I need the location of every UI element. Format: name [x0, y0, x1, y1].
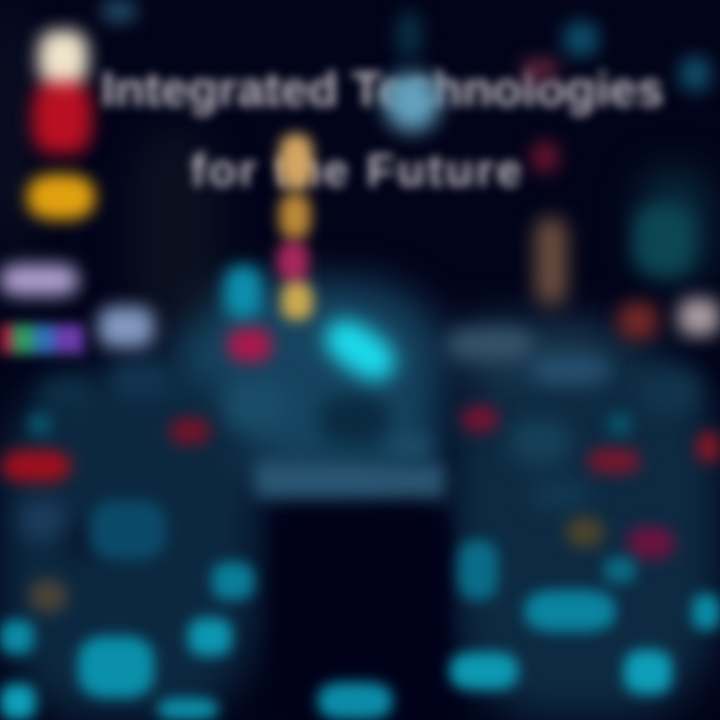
icon: yellow badge — [27, 174, 95, 220]
title: Integrated Technologies — [101, 63, 664, 117]
panel: base bar above screen — [255, 462, 445, 498]
column: brown right bar — [535, 218, 567, 304]
panel: central dark screen — [272, 512, 450, 720]
icon: pale blue box — [98, 306, 154, 348]
highlight: bright cyan diagonal — [316, 310, 404, 390]
label: lavender tag — [0, 264, 78, 296]
subtitle: for the Future — [190, 144, 524, 196]
icon: central globe — [384, 72, 440, 132]
legend: rainbow strip — [0, 324, 84, 354]
